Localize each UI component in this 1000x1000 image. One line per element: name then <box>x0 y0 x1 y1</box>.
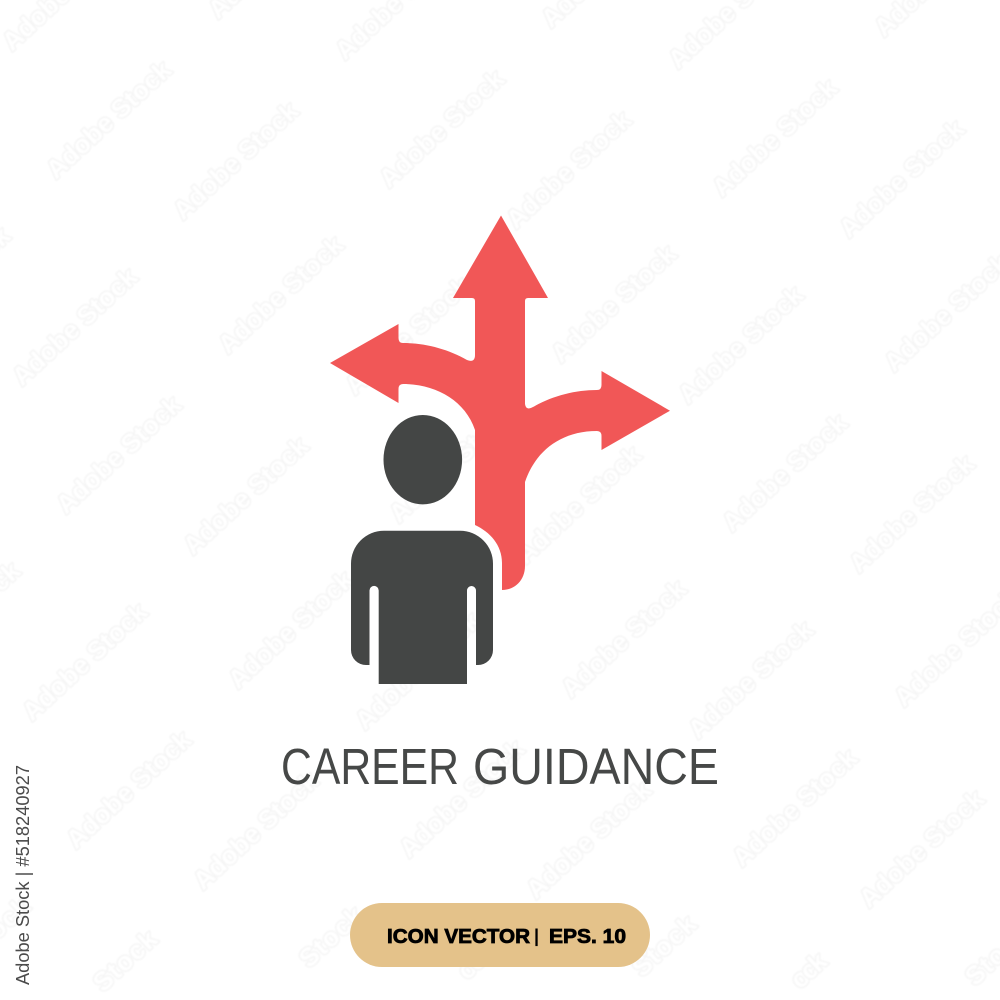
watermark pattern: Adobe Stock <box>6 261 143 391</box>
watermark pattern: Adobe Stock <box>373 63 510 193</box>
watermark pattern: Adobe Stock <box>349 605 486 735</box>
watermark pattern: Adobe Stock <box>167 95 304 225</box>
watermark pattern: Adobe Stock <box>706 72 843 202</box>
side credit text: Adobe Stock | #518240927 <box>13 765 33 985</box>
watermark pattern: Stock <box>87 923 163 997</box>
title: GUIDANCE <box>473 738 719 795</box>
icon: three-way direction arrows <box>330 216 670 590</box>
title <box>281 738 719 795</box>
badge label: EPS. 10 <box>549 926 626 948</box>
watermark pattern: Adobe Stock <box>50 389 187 519</box>
watermark pattern: Adobe Stock <box>672 279 809 409</box>
watermark pattern: Adobe Stock <box>222 564 359 694</box>
watermark pattern: Stock <box>293 899 369 973</box>
watermark pattern: Adobe Stock <box>520 774 657 904</box>
title: CAREER <box>281 738 459 795</box>
badge background <box>350 903 650 967</box>
watermark pattern: Adobe Stock <box>853 783 990 913</box>
badge label: | <box>534 926 539 946</box>
watermark pattern: Adobe Stock <box>393 733 530 863</box>
watermark pattern: Adobe Stock <box>510 439 647 569</box>
watermark pattern: Adobe Stock <box>545 238 682 368</box>
watermark pattern: Adobe Stock <box>716 407 853 537</box>
badge: icon vector <box>350 903 650 967</box>
watermark pattern: Adobe Stock <box>383 398 520 528</box>
person head <box>384 415 462 504</box>
watermark pattern: Adobe Stock <box>555 573 692 703</box>
person body <box>351 531 493 684</box>
watermark pattern: Adobe Stock <box>500 104 637 234</box>
watermark pattern: Adobe Stock <box>682 614 819 744</box>
watermark pattern: ock <box>784 946 833 994</box>
icon: person <box>351 415 493 684</box>
watermark pattern: Adobe Stock <box>177 430 314 560</box>
watermark pattern: Adobe Stock <box>60 724 197 854</box>
watermark pattern: Adobe Stock <box>187 765 324 895</box>
watermark pattern: ock <box>451 937 500 985</box>
watermark pattern: Adobe Stock <box>16 596 153 726</box>
watermark pattern: Adobe Stock <box>40 54 177 184</box>
watermark pattern: Adobe Stock <box>843 448 980 578</box>
watermark pattern: Adobe Stock <box>212 229 349 359</box>
watermark pattern: Adobe Stock <box>833 113 970 243</box>
watermark pattern: Adobe Stock <box>726 742 863 872</box>
watermark pattern: Stock <box>626 908 702 982</box>
badge label: ICON VECTOR <box>387 926 531 948</box>
badge label <box>387 926 626 948</box>
watermark pattern: Adobe Stock <box>339 270 476 400</box>
